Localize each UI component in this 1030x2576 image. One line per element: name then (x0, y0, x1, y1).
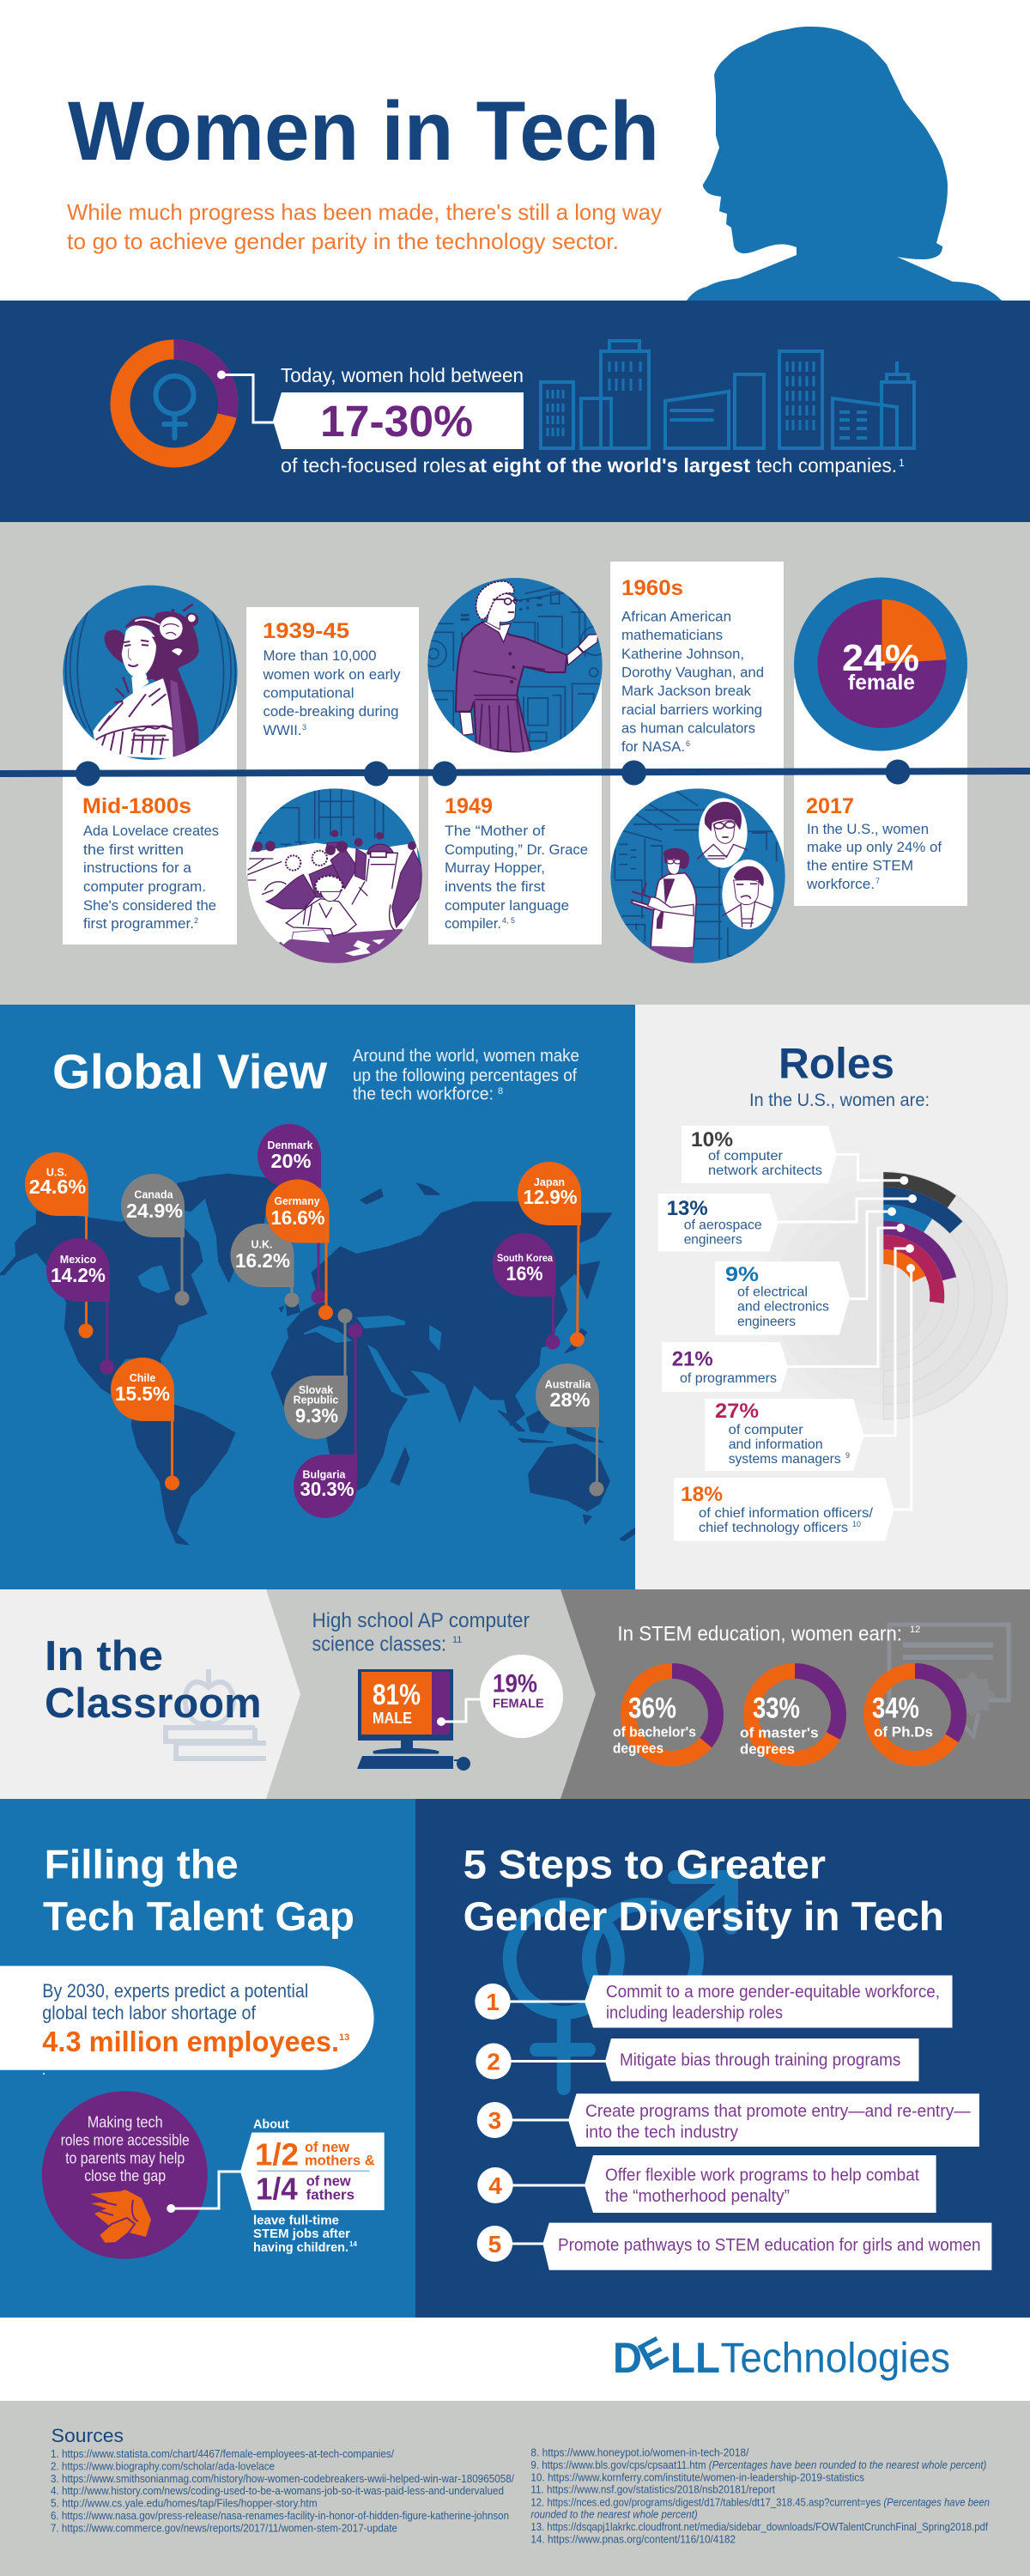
timeline: 1949: Computing,” Dr. Grace (445, 841, 588, 858)
role: aerospace engineers: 13% (667, 1197, 708, 1220)
callout: 19% female: FEMALE (493, 1697, 544, 1711)
timeline: Mid-1800s (82, 794, 219, 932)
logo: Dell Technologies: LL (670, 2334, 720, 2382)
AP classes label: 11 (452, 1635, 462, 1645)
pin: Mexico: Mexico (60, 1254, 97, 1266)
callout: 1/2 mothers, 1/4 fathers: 1/4 (256, 2171, 298, 2207)
timeline: 1960s: Katherine Johnson, (621, 646, 744, 662)
timeline: 1949: invents the first (445, 878, 545, 895)
stat text: of tech-focused roles (281, 454, 466, 477)
callout: 1/2 mothers, 1/4 fathers: STEM jobs after (253, 2227, 350, 2241)
intro text: up the following percentages of (353, 1066, 577, 1085)
radial bar chart (883, 1172, 963, 1303)
timeline: 1939-45: women work on early (263, 666, 401, 683)
pin: South Korea: 16% (506, 1262, 542, 1285)
callout: 4.3 million (0, 1966, 374, 2070)
stat text: at eight of the world's largest (469, 454, 750, 477)
connector (167, 2172, 242, 2213)
donut: Ph.Ds (871, 1671, 959, 1759)
sources list right: 13. https://dsqapj1lakrkc.cloudfront.net/media/sidebar_downloads/FOWTalentCrunchFinal_Spring2018.pdf (530, 2521, 988, 2533)
icon: computer with 81% male (357, 1669, 470, 1771)
heading: 5 Steps to Greater (464, 1842, 826, 1887)
stat text: Today, women hold between (281, 364, 524, 386)
pin: U.K.: 16.2% (235, 1249, 290, 1272)
timeline: 1960s: 6 (686, 739, 690, 748)
pin: Bulgaria: Bulgaria (302, 1468, 347, 1480)
timeline: Mid-1800s: first programmer. (83, 915, 194, 932)
sources list right: 14. https://www.pnas.org/content/116/10/4182 (530, 2533, 736, 2545)
panel: 5 steps (415, 1799, 1030, 2318)
role: aerospace engineers: of aerospace (684, 1218, 762, 1233)
timeline: 1939-45: 1939-45 (263, 619, 349, 643)
subtitle: While much progress has been made, there's still a long way (67, 199, 662, 225)
timeline: 1939-45 (263, 619, 401, 738)
step 5: 5 (488, 2231, 501, 2257)
step 4: the “motherhood penalty” (605, 2187, 790, 2206)
panel: sources (0, 2401, 1030, 2576)
pin: South Korea: South Korea (497, 1252, 553, 1264)
callout: 19% female (437, 1655, 563, 1738)
callout: 4.3 million: 13 (339, 2032, 349, 2043)
subheading: In the U.S., women are: (749, 1091, 930, 1110)
sources list right: 12. https://nces.ed.gov/programs/digest/d17/tables/dt17_318.45.asp?current=yes (Percentages have been (530, 2496, 990, 2508)
role: programmers (662, 1342, 788, 1392)
sources list left: 1. https://www.statista.com/chart/4467/female-employees-at-tech-companies/ (51, 2448, 394, 2460)
donut: bachelor's: degrees (613, 1741, 663, 1757)
role: systems managers: systems managers (729, 1452, 841, 1467)
callout: parents: Making tech (88, 2113, 163, 2131)
subtitle: to go to achieve gender parity in the technology sector. (67, 228, 619, 254)
pin: U.K.: U.K. (251, 1238, 273, 1250)
world map (0, 1174, 635, 1545)
pin: Denmark: Denmark (268, 1139, 313, 1151)
timeline: Mid-1800s: Ada Lovelace creates (83, 823, 219, 839)
concentric background rings (760, 1172, 1007, 1419)
pin: Bulgaria: 30.3% (300, 1478, 354, 1500)
timeline: 1960s: Dorothy Vaughan, and (621, 665, 764, 680)
pin: U.S. (25, 1152, 93, 1338)
step 3: 3 (488, 2107, 501, 2134)
callout: 1/2 mothers, 1/4 fathers: leave full-time (253, 2214, 339, 2228)
pie chart: 24% female: female (848, 671, 915, 695)
heading: In the (45, 1633, 163, 1680)
step 5 (477, 2223, 991, 2270)
callout: parents: to parents may help (65, 2148, 185, 2166)
icon: woman silhouette (687, 27, 1002, 301)
pin: U.K. (230, 1224, 299, 1307)
sources list left: 2. https://www.biography.com/scholar/ada-lovelace (51, 2461, 275, 2473)
stat text: 1 (899, 457, 905, 469)
heading (464, 1842, 944, 1939)
timeline: 1939-45: 3 (302, 723, 306, 732)
role: network architects (682, 1126, 837, 1183)
step 4 (477, 2155, 936, 2213)
callout: 1/2 mothers, 1/4 fathers (240, 2117, 385, 2255)
AP classes label (312, 1609, 530, 1656)
callout: 1/2 mothers, 1/4 fathers: About (253, 2117, 289, 2131)
timeline: 1939-45: code-breaking during (263, 703, 398, 720)
timeline: 1960s: as human calculators (621, 720, 755, 737)
timeline: Mid-1800s: Mid-1800s (82, 794, 191, 818)
intro text: Around the world, women make (353, 1047, 579, 1066)
timeline: Mid-1800s: the first written (83, 841, 184, 858)
sources list left: 6. https://www.nasa.gov/press-release/nasa-renames-facility-in-honor-of-hidden-figure-katherine-johnson (51, 2510, 509, 2522)
stat text: tech companies. (756, 454, 897, 477)
intro text (353, 1047, 579, 1104)
callout: parents: roles more accessible (61, 2131, 190, 2148)
icon: certificate (889, 1625, 1009, 1736)
role: CIOs and CTOs: 18% (681, 1483, 723, 1506)
sources list left: 3. https://www.smithsonianmag.com/history/how-women-codebreakers-wwii-helped-win-war-180965058/ (51, 2473, 514, 2485)
logo: Dell Technologies: E (631, 2328, 675, 2379)
pin: Germany (266, 1180, 333, 1320)
pin: Australia: 28% (549, 1388, 591, 1411)
icon: city skyline (541, 341, 914, 448)
role: CIOs and CTOs (674, 1478, 894, 1540)
pin: Canada: Canada (134, 1188, 174, 1200)
timeline line (0, 759, 1030, 787)
timeline: Mid-1800s: 2 (194, 916, 198, 925)
sources list left: 4. http://www.history.com/news/coding-used-to-be-a-womans-job-so-it-was-paid-less-and-undervalued (51, 2485, 504, 2497)
timeline: 2017 (806, 794, 942, 892)
sources list right: 9. https://www.bls.gov/cps/cpsaat11.htm (Percentages have been rounded to the nearest whole percent) (530, 2459, 986, 2471)
step 1: Commit to a more gender-equitable workforce, (606, 1983, 940, 2002)
illustration: NASA mathematicians (608, 781, 788, 966)
callout: 1/2 mothers, 1/4 fathers: 1/2 (255, 2137, 299, 2172)
panel: global view (0, 1005, 635, 1589)
pin: Australia: Australia (545, 1379, 591, 1391)
timeline: 1939-45: computational (263, 685, 354, 701)
callout: 1/2 mothers, 1/4 fathers: of new (306, 2174, 351, 2190)
pin: Germany: Germany (275, 1195, 320, 1207)
sources list right: 8. https://www.honeypot.io/women-in-tech-2018/ (530, 2447, 749, 2459)
cards backgrounds (63, 562, 967, 945)
stray mark (43, 2073, 45, 2075)
donut: bachelor's: 36% (628, 1692, 676, 1725)
timeline: 1960s: 1960s (621, 576, 683, 600)
step 2: 2 (487, 2049, 500, 2075)
pin: U.S.: 24.6% (29, 1176, 86, 1198)
callout: 1/2 mothers, 1/4 fathers: mothers & (305, 2154, 375, 2169)
step 3: Create programs that promote entry—and re-entry— (585, 2102, 971, 2121)
timeline: 1960s: Mark Jackson break (621, 683, 751, 699)
pin: Chile: Chile (130, 1372, 155, 1384)
pin: South Korea (493, 1233, 560, 1350)
role: systems managers: of computer (729, 1423, 803, 1437)
role: aerospace engineers: engineers (684, 1232, 742, 1247)
pin: Japan: 12.9% (524, 1186, 577, 1208)
panel: 17-30% band (0, 301, 1030, 522)
illustration: Ada Lovelace (60, 580, 240, 764)
illustration: Grace Hopper (427, 578, 603, 752)
pin: Canada: 24.9% (126, 1200, 183, 1222)
heading (45, 1633, 262, 1727)
pin: Bulgaria (294, 1324, 362, 1518)
pin: Denmark: 20% (271, 1150, 311, 1172)
sources list right (530, 2447, 990, 2545)
donut: bachelor's (613, 1671, 716, 1759)
sources list right: rounded to the nearest whole percent) (530, 2509, 698, 2521)
timeline: 2017: 2017 (806, 794, 854, 818)
role: systems managers (705, 1399, 864, 1471)
donut: bachelor's: of bachelor's (613, 1724, 696, 1741)
pin: Germany: 16.6% (271, 1206, 324, 1229)
AP classes label: science classes: (312, 1633, 446, 1656)
role: systems managers: and information (729, 1437, 823, 1452)
icon: gender symbols (510, 1877, 731, 2088)
role: network architects: 10% (691, 1128, 733, 1151)
heading: Gender Diversity in Tech (464, 1893, 944, 1939)
pin: Japan: Japan (534, 1176, 565, 1188)
pin: Mexico (46, 1238, 114, 1374)
callout: 1/2 mothers, 1/4 fathers: having children. (253, 2240, 348, 2255)
role: electrical engineers: engineers (737, 1315, 796, 1329)
timeline: 1939-45: WWII. (263, 722, 302, 738)
donut: master's: 33% (753, 1692, 800, 1725)
sources list left: 7. https://www.commerce.gov/news/reports/2017/11/women-stem-2017-update (51, 2522, 397, 2534)
timeline: Mid-1800s: She's considered the (83, 897, 216, 914)
timeline: 1960s (621, 576, 764, 755)
timeline: 1949: computer language (445, 897, 569, 914)
step 2 (476, 2038, 918, 2081)
step 5: Promote pathways to STEM education for girls and women (558, 2236, 980, 2255)
timeline: Mid-1800s: instructions for a (83, 860, 192, 876)
step 4: 4 (488, 2172, 502, 2199)
subtitle (67, 199, 662, 254)
timeline: 1949: The “Mother of (445, 823, 545, 839)
header panel (0, 0, 1030, 301)
role: aerospace engineers (658, 1194, 779, 1252)
pin: U.S.: U.S. (46, 1166, 67, 1178)
timeline: 1960s: racial barriers working (621, 702, 762, 718)
donut: master's (740, 1671, 839, 1759)
timeline: 1960s: mathematicians (621, 627, 723, 643)
timeline: 2017: workforce. (806, 876, 875, 892)
timeline: 2017: make up only 24% of (807, 839, 942, 855)
callout: 1/2 mothers, 1/4 fathers: fathers (306, 2188, 354, 2203)
callout: 19% female: 19% (493, 1670, 537, 1698)
AP classes label: High school AP computer (312, 1609, 530, 1632)
heading: Sources (52, 2425, 124, 2446)
donut: master's: degrees (740, 1741, 795, 1758)
panel: in the classroom (0, 1589, 1030, 1799)
callout: 4.3 million: global tech labor shortage of (42, 2002, 257, 2024)
pin: Canada (121, 1174, 189, 1305)
pin: Chile (111, 1358, 179, 1491)
stat text: 17-30% (320, 397, 473, 446)
role: electrical engineers: of electrical (737, 1285, 808, 1300)
heading: Global View (52, 1044, 328, 1099)
timeline: 1960s: African American (621, 608, 731, 625)
step 1: 1 (486, 1989, 500, 2015)
heading: Roles (779, 1039, 894, 1087)
role: network architects: of computer (708, 1149, 784, 1163)
sources list left (51, 2448, 514, 2534)
donut chart with female symbol (120, 349, 228, 458)
icon: computer with 81% male: 81% (373, 1679, 421, 1711)
pin: Slovak Republic: Republic (294, 1394, 338, 1406)
connector (217, 371, 275, 422)
step 4: Offer flexible work programs to help combat (605, 2166, 919, 2184)
donut: master's: of master's (740, 1725, 819, 1741)
heading: Filling the (45, 1842, 239, 1887)
timeline: 1949: Murray Hopper, (445, 860, 545, 876)
role: programmers: 21% (672, 1348, 713, 1371)
pin: Chile: 15.5% (115, 1382, 170, 1405)
timeline: 1939-45: More than 10,000 (263, 647, 376, 664)
donut: Ph.Ds: 34% (872, 1692, 919, 1725)
timeline: 2017: the entire STEM (807, 857, 913, 874)
step 1 (475, 1975, 953, 2028)
callout: parents (42, 2091, 208, 2259)
pin: Slovak Republic: Slovak (299, 1384, 333, 1396)
role: CIOs and CTOs: 10 (852, 1520, 861, 1528)
role: electrical engineers (715, 1261, 850, 1335)
heading: Tech Talent Gap (43, 1893, 354, 1939)
heading: Classroom (45, 1680, 262, 1727)
panel: roles (635, 1005, 1030, 1589)
donut: Ph.Ds: of Ph.Ds (874, 1724, 933, 1741)
pin: Slovak Republic: 9.3% (295, 1405, 338, 1427)
icon: computer with 81% male: MALE (373, 1710, 412, 1727)
pie chart: 24% female: 24% (842, 637, 919, 679)
pin: Australia (536, 1364, 604, 1496)
panel: filling the tech talent gap (0, 1799, 415, 2318)
callout: 1/2 mothers, 1/4 fathers: of new (305, 2140, 349, 2155)
connectors (779, 1154, 917, 1510)
role: electrical engineers: and electronics (737, 1300, 829, 1314)
timeline: 1949: 4, 5 (502, 916, 515, 925)
illustration: code-breakers (247, 788, 422, 963)
pin: Japan (518, 1162, 585, 1346)
role: systems managers: 9 (845, 1451, 850, 1460)
timeline: 2017: 7 (876, 877, 880, 885)
callout: parents: close the gap (84, 2166, 166, 2184)
step 1: including leadership roles (606, 2004, 783, 2023)
step 3: into the tech industry (585, 2123, 738, 2142)
icon: hands (90, 2190, 151, 2244)
role: systems managers: 27% (715, 1400, 759, 1423)
timeline: Mid-1800s: computer program. (83, 878, 206, 895)
pie chart: 24% female (794, 577, 967, 750)
callout: 4.3 million: 4.3 million employees. (42, 2026, 339, 2057)
pin: Slovak Republic (284, 1309, 352, 1439)
pin: Mexico: 14.2% (51, 1264, 106, 1286)
step 2: Mitigate bias through training programs (620, 2051, 900, 2070)
timeline: 1949: 1949 (445, 794, 493, 818)
title: Women in Tech (68, 84, 659, 178)
role: programmers: of programmers (680, 1371, 777, 1386)
timeline: 1949 (445, 794, 588, 932)
heading (43, 1842, 354, 1939)
role: electrical engineers: 9% (725, 1263, 759, 1286)
logo: Dell Technologies: Technologies (721, 2336, 950, 2382)
sources list left: 5. http://www.cs.yale.edu/homes/tap/Files/hopper-story.htm (51, 2498, 318, 2510)
STEM education label: 12 (910, 1625, 920, 1635)
sources list right: 10. https://www.kornferry.com/institute/women-in-leadership-2019-statistics (530, 2471, 864, 2483)
intro text: 8 (498, 1086, 503, 1097)
intro text: the tech workforce: (353, 1085, 494, 1104)
timeline: 2017: In the U.S., women (807, 821, 929, 837)
timeline: 1960s: for NASA. (621, 738, 685, 755)
icon: apple and books (166, 1669, 266, 1759)
timeline: 1949: compiler. (445, 915, 501, 932)
callout: 4.3 million: By 2030, experts predict a potential (42, 1980, 308, 2002)
STEM education label: In STEM education, women earn: (617, 1623, 902, 1646)
sources list right: 11. https://www.nsf.gov/statistics/2018/nsb20181/report (530, 2484, 775, 2496)
role: CIOs and CTOs: chief technology officers (699, 1521, 848, 1535)
role: network architects: network architects (708, 1163, 822, 1178)
stat text (273, 364, 905, 477)
logo: Dell Technologies: D (613, 2334, 642, 2382)
panel: timeline (0, 522, 1030, 1005)
role: CIOs and CTOs: of chief information officers/ (699, 1506, 874, 1521)
callout: 1/2 mothers, 1/4 fathers: 14 (349, 2240, 357, 2248)
pin: Denmark (258, 1124, 326, 1303)
step 3 (477, 2093, 979, 2147)
logo: Dell Technologies (613, 2328, 950, 2382)
